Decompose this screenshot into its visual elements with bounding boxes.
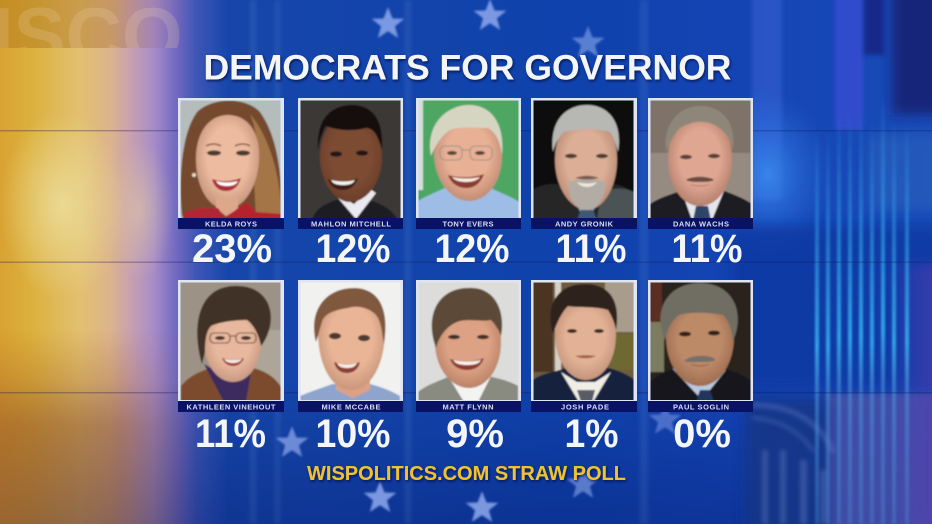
- name bar: [178, 401, 284, 412]
- percent: 0%: [673, 412, 731, 456]
- name bar: KATHLEEN VINEHOUT: [186, 402, 276, 411]
- name bar: MATT FLYNN: [442, 402, 494, 411]
- portrait: Dana Wachs: [648, 98, 754, 220]
- percent: 12%: [316, 227, 390, 271]
- name bar: [416, 401, 521, 412]
- candidate card: Paul Soglin: [648, 280, 754, 456]
- candidate card: Kathleen Vinehout: [178, 280, 284, 456]
- portrait: Mike McCabe: [298, 280, 404, 402]
- name bar: TONY EVERS: [442, 219, 494, 228]
- percent: 1%: [564, 412, 618, 456]
- name bar: JOSH PADE: [561, 402, 609, 411]
- portrait: Paul Soglin: [648, 280, 754, 402]
- title: DEMOCRATS FOR GOVERNOR: [204, 48, 731, 88]
- candidate card: Dana Wachs: [648, 98, 754, 271]
- percent: 11%: [195, 412, 266, 456]
- horizontal rules: [0, 130, 932, 393]
- candidate card: Tony Evers: [416, 98, 522, 271]
- name bar: [531, 218, 637, 229]
- source footer: WISPOLITICS.COM STRAW POLL: [307, 463, 626, 485]
- percent: 12%: [434, 227, 510, 271]
- portrait: Kathleen Vinehout: [178, 280, 284, 402]
- percent: 23%: [192, 227, 272, 271]
- percent: 11%: [672, 227, 742, 271]
- name bar: [178, 218, 284, 229]
- name bar: [531, 401, 637, 412]
- name bar: ANDY GRONIK: [555, 219, 614, 228]
- name bar: PAUL SOGLIN: [673, 402, 729, 411]
- percent: 11%: [556, 227, 626, 271]
- portrait: Josh Pade: [531, 280, 637, 402]
- portrait: Tony Evers: [416, 98, 522, 220]
- candidate card: Matt Flynn: [416, 280, 522, 456]
- name bar: [648, 218, 753, 229]
- percent: 9%: [446, 412, 504, 456]
- vertical light stripes: [815, 90, 909, 524]
- candidate card: Josh Pade: [531, 280, 637, 456]
- right panel blocks: [706, 0, 932, 524]
- name bar: [298, 218, 403, 229]
- candidate card: Mahlon Mitchell: [298, 98, 404, 271]
- name bar: MIKE MCCABE: [322, 402, 380, 411]
- candidate card: Kelda Roys: [178, 98, 284, 271]
- percent: 10%: [316, 412, 390, 456]
- name bar: DANA WACHS: [673, 219, 729, 228]
- stars: [276, 0, 682, 522]
- portrait: Kelda Roys: [180, 100, 280, 218]
- portrait: Andy Gronik: [531, 98, 637, 220]
- name bar: MAHLON MITCHELL: [311, 219, 391, 228]
- name bar: [298, 401, 403, 412]
- name bar: [416, 218, 521, 229]
- name bar: [648, 401, 753, 412]
- candidate card: Mike McCabe: [298, 280, 404, 456]
- candidate card: Andy Gronik: [531, 98, 637, 271]
- portrait: Mahlon Mitchell: [298, 98, 404, 220]
- portrait: Matt Flynn: [416, 280, 522, 402]
- name bar: KELDA ROYS: [205, 219, 257, 228]
